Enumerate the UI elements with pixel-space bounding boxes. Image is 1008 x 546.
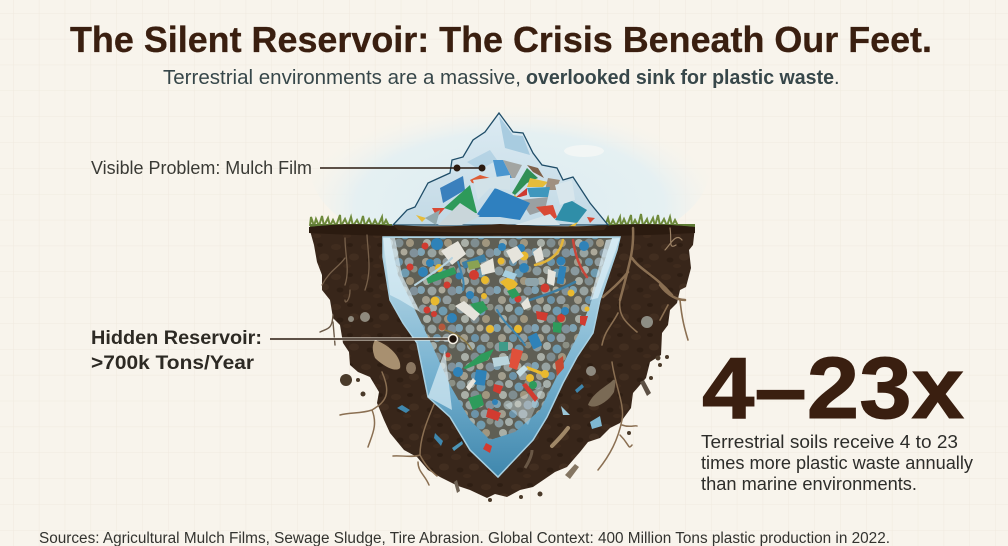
peak shading xyxy=(467,116,575,205)
subtitle xyxy=(163,67,840,89)
reservoir facets xyxy=(383,238,620,425)
callout: hidden reservoir: >700k Tons/Year xyxy=(91,352,254,374)
subtitle: . xyxy=(834,67,840,89)
packed microplastics xyxy=(390,238,612,440)
soil objects: pebbles and worms xyxy=(340,312,653,468)
roots xyxy=(320,228,688,485)
grass xyxy=(310,214,695,226)
callout: hidden reservoir xyxy=(91,327,458,374)
callout: hidden reservoir: Hidden Reservoir: xyxy=(91,327,262,349)
cloud xyxy=(564,145,604,157)
mulch film plastics on peak xyxy=(416,160,595,228)
subtitle: Terrestrial environments are a massive, xyxy=(163,67,521,89)
statistic description: times more plastic waste annually xyxy=(701,453,973,473)
top soil band xyxy=(309,224,695,236)
statistic description: than marine environments. xyxy=(701,474,917,494)
microplastic particles xyxy=(406,238,590,453)
big statistic: 4–23x xyxy=(702,340,964,437)
callout: visible problem xyxy=(91,158,486,178)
visible iceberg peak xyxy=(393,113,608,225)
subtitle: overlooked sink for plastic waste xyxy=(526,67,834,89)
callout: visible problem: Visible Problem: Mulch Film xyxy=(91,158,312,178)
submerged plastic reservoir xyxy=(383,237,620,477)
sky glow xyxy=(310,73,710,263)
title: The Silent Reservoir: The Crisis Beneath Our Feet. xyxy=(70,19,932,60)
illustration: plastic iceberg in soil xyxy=(309,73,710,502)
statistic description: Terrestrial soils receive 4 to 23 xyxy=(701,432,958,452)
soil cross-section xyxy=(309,224,695,498)
statistic description xyxy=(701,432,973,494)
soil lip over peak base xyxy=(393,224,608,233)
scattered debris xyxy=(356,355,669,502)
